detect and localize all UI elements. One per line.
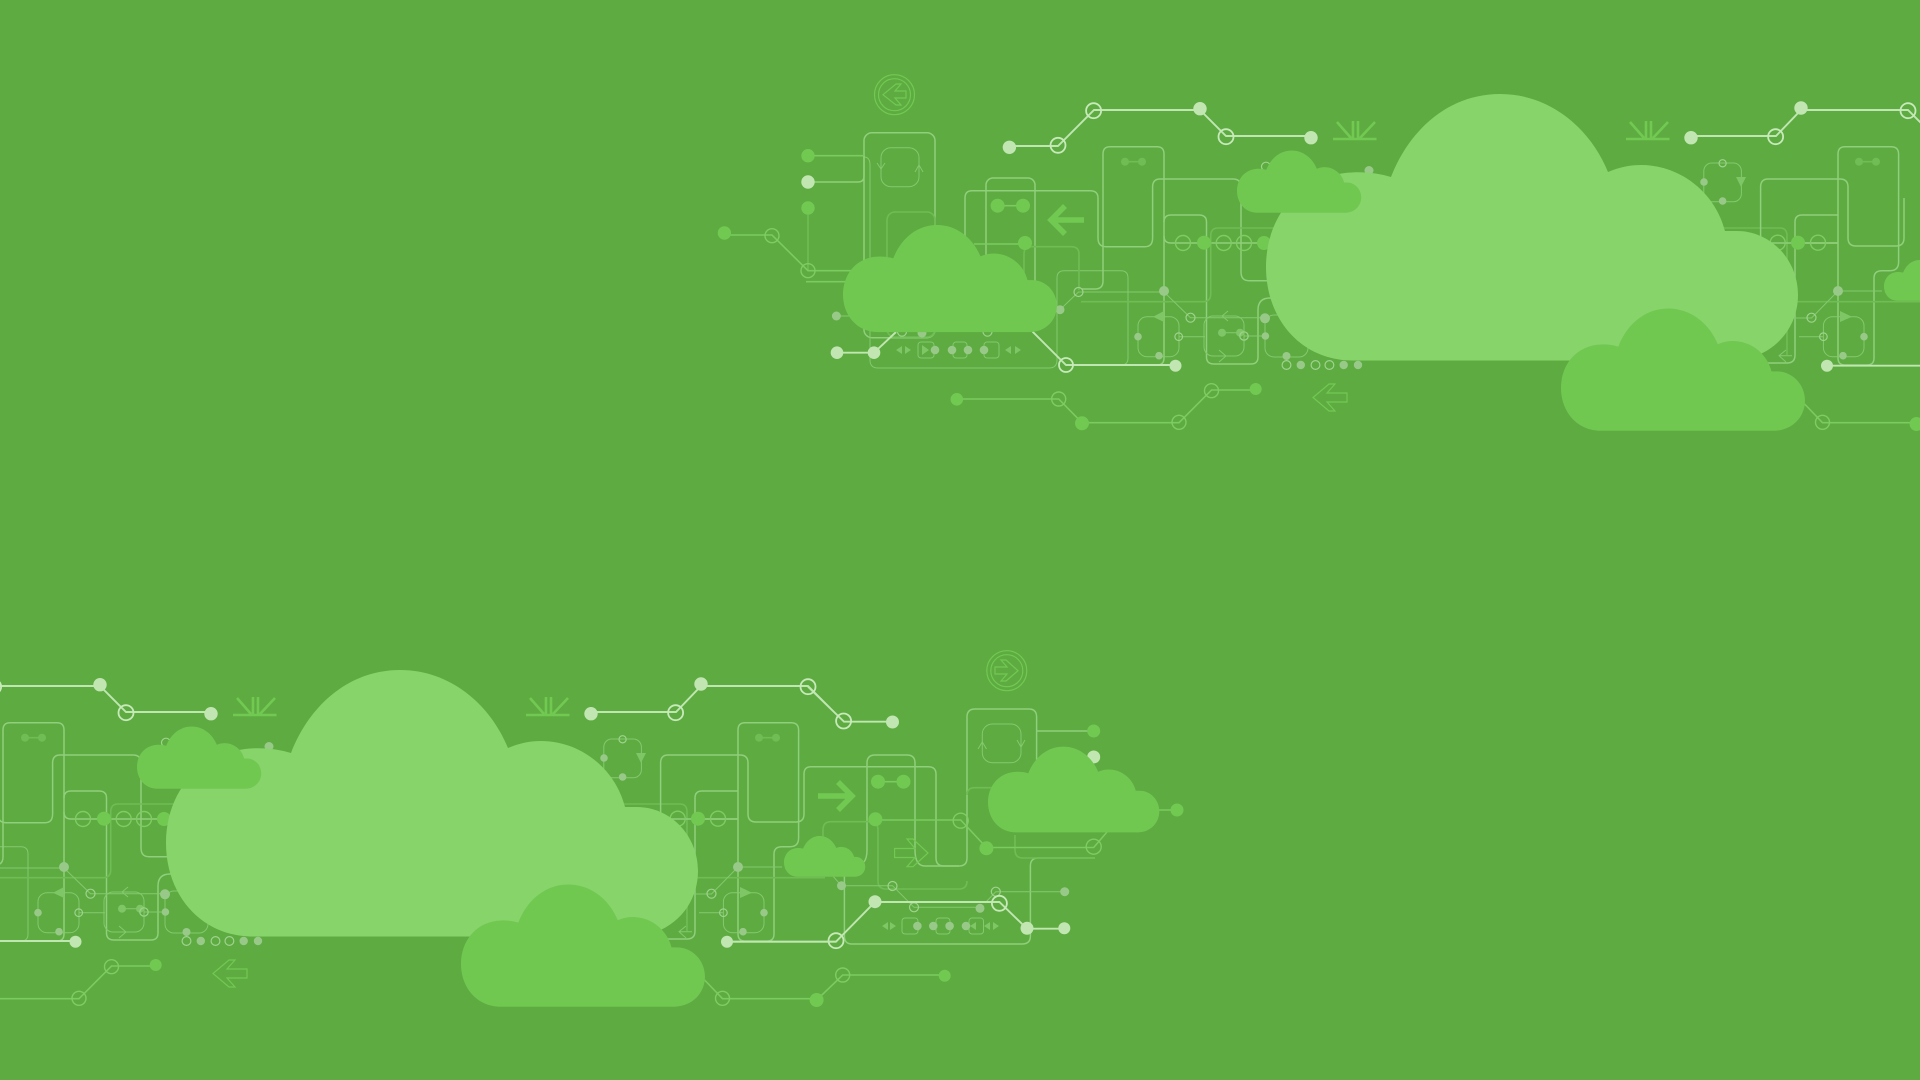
icon: circled right arrow — [987, 651, 1027, 691]
icons: mini row — [882, 918, 999, 934]
link: upper white continuation — [808, 687, 899, 728]
cloud: medium left — [843, 225, 1057, 332]
cloud: tiny right edge — [1884, 260, 1920, 301]
cloud: large — [1266, 94, 1798, 360]
arrow: outlined right — [895, 839, 928, 867]
links: grey connectors — [832, 162, 1882, 338]
link: left stacked nodes — [718, 149, 864, 282]
link: lower green centre — [950, 383, 1262, 430]
arrow: outlined left — [1313, 384, 1347, 411]
link: lower green right — [1805, 404, 1920, 431]
cloud: medium front — [1561, 308, 1805, 431]
rectangles: circuit traces — [804, 709, 1095, 944]
icons: mini row — [896, 342, 1021, 358]
scene: circuit and clouds, bottom copy — [0, 651, 865, 1007]
links: grey connectors — [833, 877, 1069, 913]
loop details — [1134, 160, 1868, 362]
arrow: solid left — [1051, 206, 1084, 234]
icons: sprout marks — [1333, 121, 1670, 139]
rectangles: circuit traces — [864, 133, 1920, 368]
icon: circled left arrow — [874, 75, 914, 115]
dots row — [1282, 361, 1362, 369]
links: green connectors — [868, 724, 1184, 855]
cloud: lower right — [988, 747, 1159, 832]
nodes: middle row — [1176, 235, 1826, 250]
arrow: solid right — [818, 782, 852, 810]
link: lower green — [817, 968, 951, 1000]
scene: circuit and clouds, top — [718, 75, 1920, 431]
link: lower white right — [1821, 360, 1920, 372]
link: top right white — [1684, 101, 1920, 144]
link: lower white — [727, 895, 1070, 948]
link: top white — [1003, 102, 1318, 154]
link: lower white left — [831, 332, 1182, 372]
nodes: narrow pair and connector — [974, 158, 1880, 250]
cloud: small on large — [1237, 150, 1361, 213]
circuit extension: lower centre network — [727, 651, 1184, 1000]
